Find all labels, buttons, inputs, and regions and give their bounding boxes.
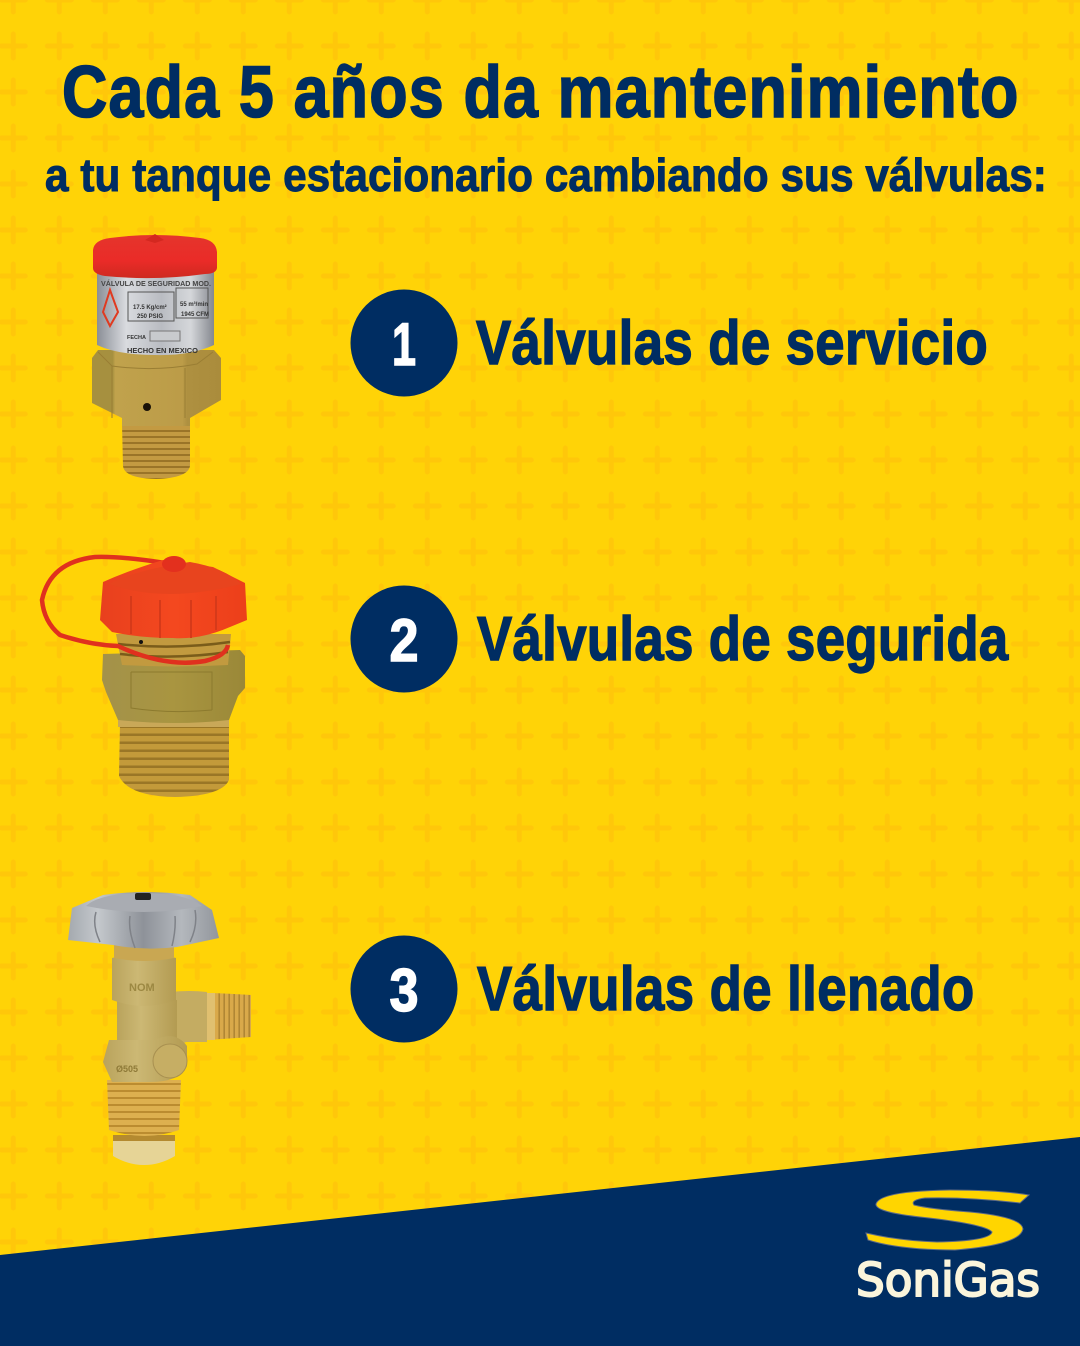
icon: valve 1: 1945 CFM (181, 312, 209, 318)
logo: SoniGas (856, 1190, 1040, 1307)
title: Cada 5 años da mantenimiento (62, 52, 1018, 133)
thread (119, 722, 229, 797)
icon: S swoosh (866, 1190, 1029, 1250)
icon: valve 1: VÁLVULA DE SEGURIDAD MOD. (101, 279, 211, 288)
side arm (170, 991, 207, 1050)
label 3: Válvulas de llenado (477, 955, 974, 1024)
tip (113, 1135, 175, 1165)
icon: valve 1: HECHO EN MEXICO (127, 348, 199, 355)
label 2: Válvulas de segurida (477, 605, 1009, 674)
stem (114, 945, 174, 961)
handle (68, 892, 219, 949)
wordmark: SoniGas (856, 1253, 1040, 1307)
collar (103, 1036, 187, 1082)
icon: valve 1: FECHA (127, 335, 146, 341)
collar rings (116, 634, 231, 666)
icon: valve 3 (68, 892, 251, 1165)
footer band (0, 1137, 1080, 1346)
item 1 (350, 290, 988, 396)
icon: valve 1: 250 PSIG (137, 314, 163, 320)
number badge 1: 1 (392, 311, 416, 378)
icon: valve 1: 55 m³/min (180, 301, 208, 308)
strap (42, 557, 228, 663)
thread (122, 424, 190, 479)
icon: valve 3: Ø505 (116, 1064, 138, 1074)
bottom thread (107, 1080, 181, 1136)
red cap (93, 235, 217, 278)
red cap (100, 560, 247, 638)
icon: valve 3: NOM (129, 982, 155, 994)
hex body (92, 350, 221, 426)
number badge 2: 2 (390, 607, 418, 674)
icon: valve 1 (92, 234, 221, 479)
item 3 (350, 936, 974, 1042)
number badge 2 (350, 586, 458, 692)
silver label (97, 272, 214, 355)
number badge 3: 3 (390, 957, 418, 1024)
upper body (112, 954, 176, 1006)
item 2 (350, 586, 1009, 692)
icon: valve 2 (42, 556, 247, 797)
lower body (117, 1000, 177, 1050)
side thread (207, 993, 251, 1040)
label 1: Válvulas de servicio (476, 309, 988, 378)
hex body (102, 650, 245, 723)
icon: valve 1: 17.5 Kg/cm² (133, 304, 167, 311)
number badge 1 (350, 290, 458, 396)
subtitle: a tu tanque estacionario cambiando sus válvulas: (45, 150, 1047, 201)
number badge 3 (350, 936, 458, 1042)
